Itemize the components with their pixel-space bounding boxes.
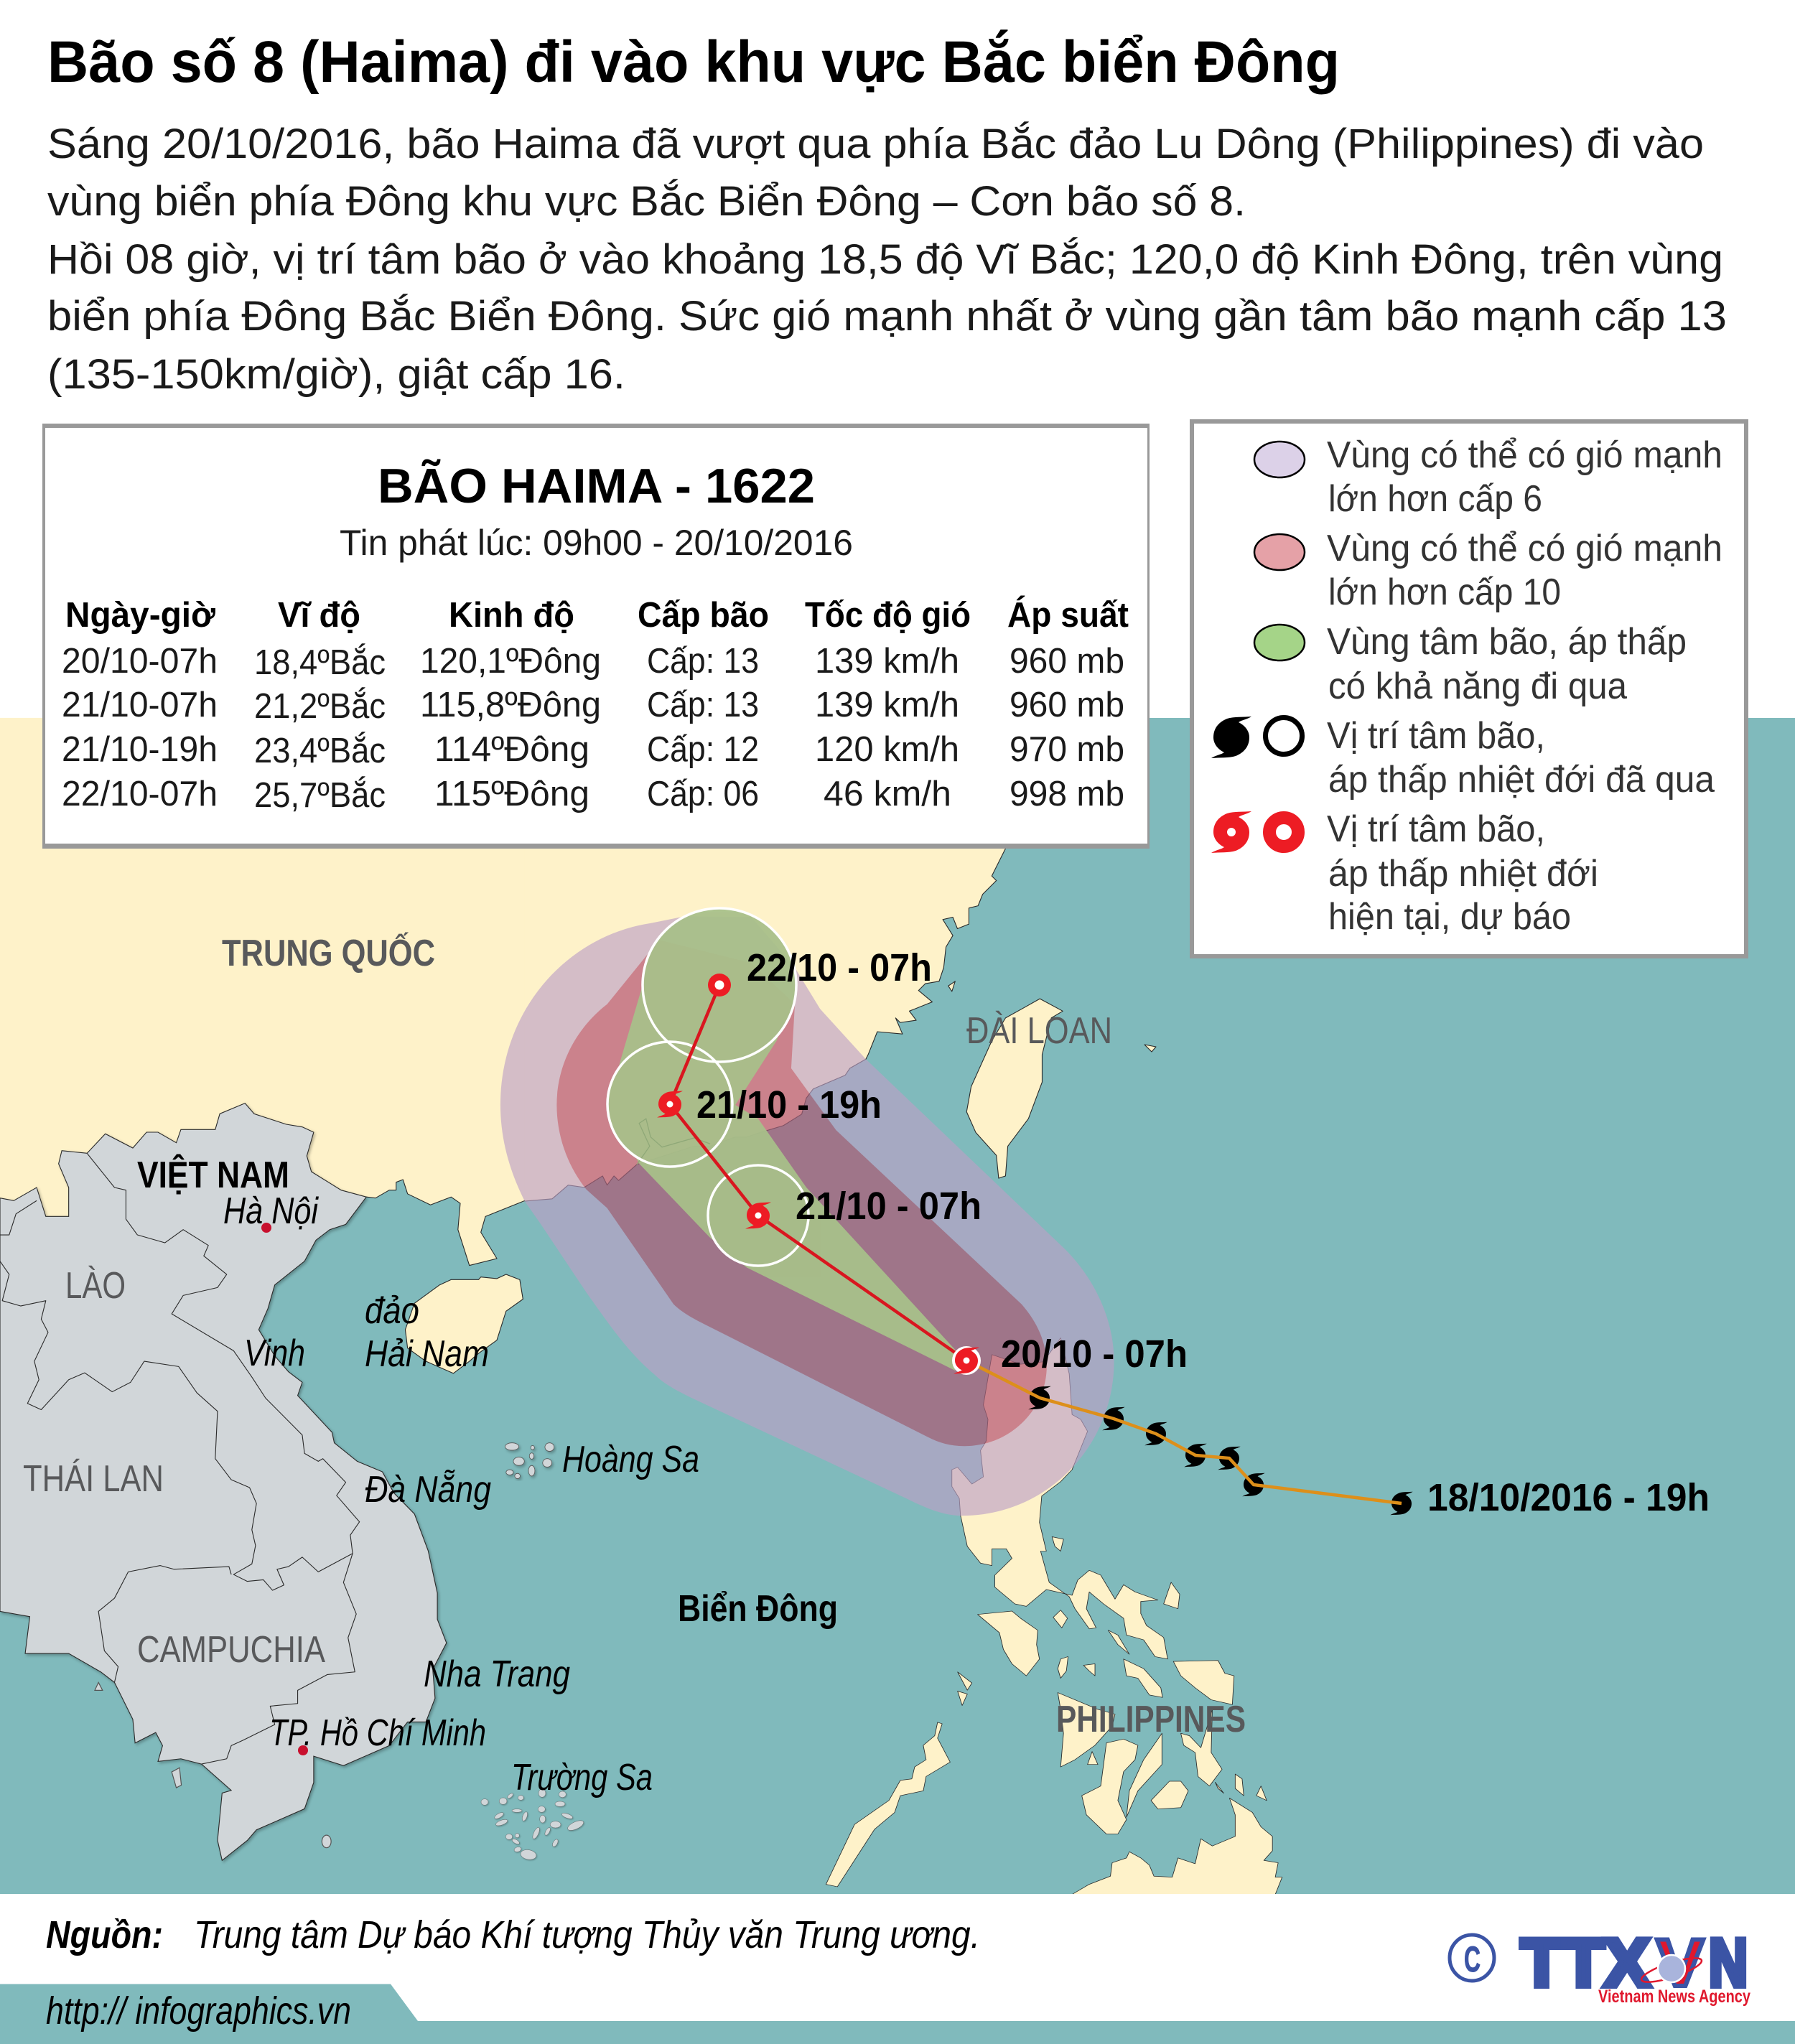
country labels: LÀO	[65, 1265, 126, 1307]
legend text: Vùng có thể có gió mạnh	[1327, 528, 1722, 569]
source label: Nguồn:	[46, 1913, 163, 1956]
intro text block: Sáng 20/10/2016, bão Haima đã vượt qua phía Bắc đảo Lu Dông (Philippines) đi vào	[47, 121, 1704, 167]
copyright icon: C	[1464, 1939, 1481, 1979]
storm zones	[500, 908, 1114, 1516]
table rows: Cấp: 13	[647, 686, 759, 724]
table rows: 21,2ºBắc	[254, 687, 386, 726]
intro text block: vùng biển phía Đông khu vực Bắc Biển Đông – Cơn bão số 8.	[47, 178, 1246, 225]
table header row: Áp suất	[1007, 596, 1129, 635]
table rows: 115,8ºĐông	[420, 686, 601, 724]
table header row: Ngày-giờ	[65, 596, 215, 635]
city and island labels: Hải Nam	[365, 1333, 489, 1375]
country labels: ĐÀI LOAN	[966, 1010, 1112, 1052]
intro text block: (135-150km/giờ), giật cấp 16.	[47, 351, 625, 398]
city and island labels: Hoàng Sa	[562, 1439, 699, 1480]
city and island labels	[223, 1190, 699, 1798]
intro text block: biển phía Đông Bắc Biển Đông. Sức gió mạnh nhất ở vùng gần tâm bão mạnh cấp 13	[47, 293, 1727, 340]
table rows: 25,7ºBắc	[254, 776, 386, 815]
intro text block: Hồi 08 giờ, vị trí tâm bão ở vào khoảng 18,5 độ Vĩ Bắc; 120,0 độ Kinh Đông, trên vùng	[47, 236, 1723, 283]
city and island labels: TP. Hồ Chí Minh	[269, 1712, 486, 1754]
storm time labels	[696, 946, 1710, 1519]
table rows: 21/10-07h	[62, 686, 218, 724]
storm time labels: 21/10 - 07h	[796, 1185, 982, 1228]
legend icon: current storm	[1211, 811, 1251, 853]
table rows: 23,4ºBắc	[254, 732, 386, 770]
table rows: 20/10-07h	[62, 642, 218, 681]
table rows: 18,4ºBắc	[254, 643, 386, 682]
logo: TTXVN: V	[1656, 1925, 1704, 2000]
forecast markers	[657, 974, 981, 1375]
city and island labels: Đà Nẵng	[365, 1469, 491, 1511]
sea background	[0, 718, 1795, 1894]
title: Bão số 8 (Haima) đi vào khu vực Bắc biển Đông	[47, 29, 1340, 95]
table rows: 21/10-19h	[62, 730, 218, 769]
table header row: Cấp bão	[638, 596, 769, 635]
table rows: 970 mb	[1010, 730, 1124, 769]
logo: TTXVN: TTX	[1521, 1925, 1650, 2000]
footer teal bar with url tab	[0, 1984, 1795, 2044]
legend text: hiện tại, dự báo	[1328, 896, 1571, 938]
table rows	[62, 642, 1124, 815]
table rows: 960 mb	[1010, 686, 1124, 724]
panel: storm data table	[42, 424, 1150, 849]
table header row	[65, 596, 1129, 635]
country labels: TRUNG QUỐC	[222, 932, 435, 974]
issue time: Tin phát lúc: 09h00 - 20/10/2016	[340, 523, 853, 563]
table rows: 115ºĐông	[434, 775, 589, 813]
zone: storm centre path	[607, 908, 957, 1371]
legend text: Vị trí tâm bão,	[1327, 808, 1545, 850]
faint estuary coast under centre zone	[637, 1119, 710, 1165]
table header row: Vĩ độ	[278, 596, 360, 635]
table rows: 46 km/h	[824, 775, 951, 813]
legend icon: past depression	[1265, 718, 1302, 754]
table heading: BÃO HAIMA - 1622	[378, 459, 815, 513]
table rows: 22/10-07h	[62, 775, 218, 813]
table header row: Kinh độ	[449, 596, 574, 635]
land: southern China coast (east part)	[523, 718, 1026, 1203]
zone: wind above level 6	[500, 916, 1114, 1516]
city and island labels: Hà Nội	[223, 1190, 319, 1232]
footer	[0, 1894, 1795, 2044]
city and island labels: Trường Sa	[511, 1757, 653, 1798]
panel: legend	[1192, 421, 1746, 956]
legend swatch: storm centre	[1254, 625, 1305, 661]
land: Indochina and Hainan	[0, 718, 525, 1860]
table rows: 120 km/h	[815, 730, 959, 769]
legend text: Vị trí tâm bão,	[1327, 715, 1545, 757]
table rows: 139 km/h	[815, 686, 959, 724]
url: http:// infographics.vn	[46, 1989, 351, 2033]
legend text: Vùng tâm bão, áp thấp	[1327, 621, 1687, 663]
table rows: 114ºĐông	[434, 730, 589, 769]
copyright icon	[1450, 1935, 1494, 1981]
legend swatch: level 10	[1254, 534, 1305, 570]
past track line	[966, 1361, 1402, 1503]
legend icon: current depression	[1269, 818, 1298, 846]
legend text: áp thấp nhiệt đới đã qua	[1328, 759, 1715, 801]
table header row: Tốc độ gió	[805, 596, 971, 635]
legend text: lớn hơn cấp 10	[1328, 571, 1561, 613]
logo: TTXVN	[1521, 1925, 1748, 2000]
table rows: Cấp: 06	[647, 775, 759, 813]
land: Taiwan	[966, 999, 1063, 1178]
table rows: 120,1ºĐông	[420, 642, 601, 681]
legend text: áp thấp nhiệt đới	[1328, 853, 1598, 895]
storm time labels: 21/10 - 19h	[696, 1083, 882, 1126]
city and island labels: Nha Trang	[424, 1653, 570, 1695]
legend swatch: level 6	[1254, 442, 1305, 477]
land: small island east of Taiwan	[1144, 1045, 1156, 1052]
islands: Hoang Sa	[505, 1443, 554, 1479]
forecast track line	[670, 985, 966, 1361]
logo tagline: Vietnam News Agency	[1598, 1987, 1750, 2007]
country labels: CAMPUCHIA	[137, 1629, 325, 1671]
legend icon: past storm	[1211, 717, 1251, 758]
country labels: THÁI LAN	[23, 1458, 164, 1500]
city and island labels: Vinh	[244, 1333, 305, 1374]
table rows: 139 km/h	[815, 642, 959, 681]
legend text	[1327, 434, 1722, 938]
past track markers	[1028, 1386, 1413, 1515]
table rows: 998 mb	[1010, 775, 1124, 813]
legend text: Vùng có thể có gió mạnh	[1327, 434, 1722, 476]
map	[0, 718, 1795, 1895]
islands: Truong Sa	[481, 1789, 585, 1861]
zone: wind above level 10	[556, 940, 1047, 1446]
table rows: Cấp: 13	[647, 642, 759, 681]
country labels: Biển Đông	[678, 1588, 838, 1630]
country labels: PHILIPPINES	[1056, 1699, 1246, 1740]
logo: TTXVN: N	[1709, 1925, 1748, 2000]
legend text: có khả năng đi qua	[1328, 666, 1627, 707]
storm time labels: 22/10 - 07h	[747, 946, 932, 989]
storm time labels: 18/10/2016 - 19h	[1427, 1476, 1710, 1519]
country labels: VIỆT NAM	[137, 1154, 289, 1196]
land: Philippines	[826, 1338, 1282, 1895]
country labels	[23, 932, 1246, 1740]
table rows: 960 mb	[1010, 642, 1124, 681]
city dots	[261, 1223, 308, 1755]
intro text block	[47, 121, 1727, 398]
forecast circles	[607, 908, 808, 1266]
storm time labels: 20/10 - 07h	[1001, 1333, 1188, 1376]
legend text: lớn hơn cấp 6	[1328, 478, 1542, 520]
table rows: Cấp: 12	[647, 730, 759, 769]
city and island labels: đảo	[365, 1290, 419, 1332]
source text: Trung tâm Dự báo Khí tượng Thủy văn Trung ương.	[194, 1913, 980, 1956]
